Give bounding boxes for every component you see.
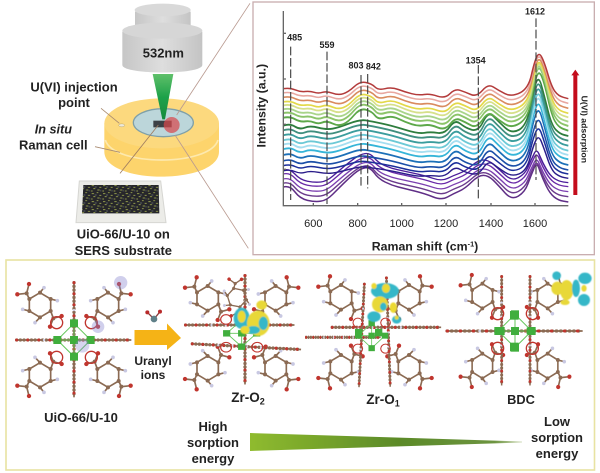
x axis tick labels: 600 [304,218,322,230]
label: high sorption energy: energy [192,451,235,466]
x axis tick labels: 1400 [479,218,503,230]
icon: objective lens 532nm: 532nm [143,45,184,60]
label: injection point [30,80,119,123]
x axis tick labels: 1200 [434,218,458,230]
peak labels: 1612 [525,6,545,16]
x axis tick labels: 800 [349,218,367,230]
icon: yellow Raman cell [104,98,219,177]
dashed peak markers [291,18,536,204]
y axis title: Intensity (a.u.) [255,64,269,147]
x axis tick labels [304,218,547,230]
arrow: uranyl ions [134,324,181,350]
x axis title: ) [474,240,478,254]
peak labels: 485 [287,33,302,43]
line chart: Raman spectra series [283,54,568,202]
wedge: sorption energy gradient [250,433,522,451]
caption: substrate [75,227,172,258]
molecule: BDC [447,271,592,389]
label: low sorption energy [531,414,583,461]
label: high sorption energy [187,419,239,466]
label: in situ Raman cell: Raman cell [19,137,88,152]
peak labels: 803 [348,61,363,71]
label: injection point: point [58,95,91,110]
label: Zr-O2: Zr-O [231,390,260,405]
molecule: UiO-66/U-10 [15,276,133,398]
peak labels: 1354 [466,56,486,66]
peak labels [287,6,545,72]
label: Zr-O1: 1 [395,398,400,408]
label: in situ Raman cell [19,123,120,152]
label: low sorption energy: energy [536,446,579,461]
icon: objective lens 532nm [122,4,202,72]
label: uranyl ions [134,354,172,382]
icon: uranyl ion [145,310,162,322]
molecule: Zr-O1 [306,274,441,390]
zoom connector lines [120,3,250,248]
molecule: Zr-O2 [183,271,301,391]
x axis title: -1 [468,240,474,249]
label: BDC: BDC [507,392,535,407]
label: high sorption energy: High [199,419,227,434]
x axis title: Raman shift (cm [372,240,468,254]
label: low sorption energy: sorption [531,430,583,445]
arrow: U(VI) adsorption: U(VI) adsorption [579,96,589,163]
x axis tick labels: 1600 [523,218,547,230]
label: Zr-O2: 2 [260,396,265,406]
label: high sorption energy: sorption [187,435,239,450]
icon: laser beam [153,74,173,119]
label: uranyl ions: ions [141,368,166,382]
panel: in situ Raman setup [19,3,250,258]
panel: Raman spectra [253,2,594,255]
peak labels: 842 [366,62,381,72]
label: Zr-O1: Zr-O [366,392,395,407]
peak labels: 559 [319,40,334,50]
caption: substrate: SERS substrate [75,243,172,258]
label: UiO-66/U-10: UiO-66/U-10 [44,410,118,425]
label: uranyl ions: Uranyl [134,354,172,368]
label: in situ Raman cell: In situ [35,123,72,137]
x axis tick labels: 1000 [389,218,414,230]
arrow: U(VI) adsorption [571,70,589,195]
caption: substrate: UiO-66/U-10 on [77,227,170,242]
label: injection point: U(VI) injection [30,80,118,95]
panel: DFT structures [6,260,594,470]
chart axes [283,11,568,206]
icon: SERS substrate photo [76,181,166,223]
label: low sorption energy: Low [544,414,571,429]
